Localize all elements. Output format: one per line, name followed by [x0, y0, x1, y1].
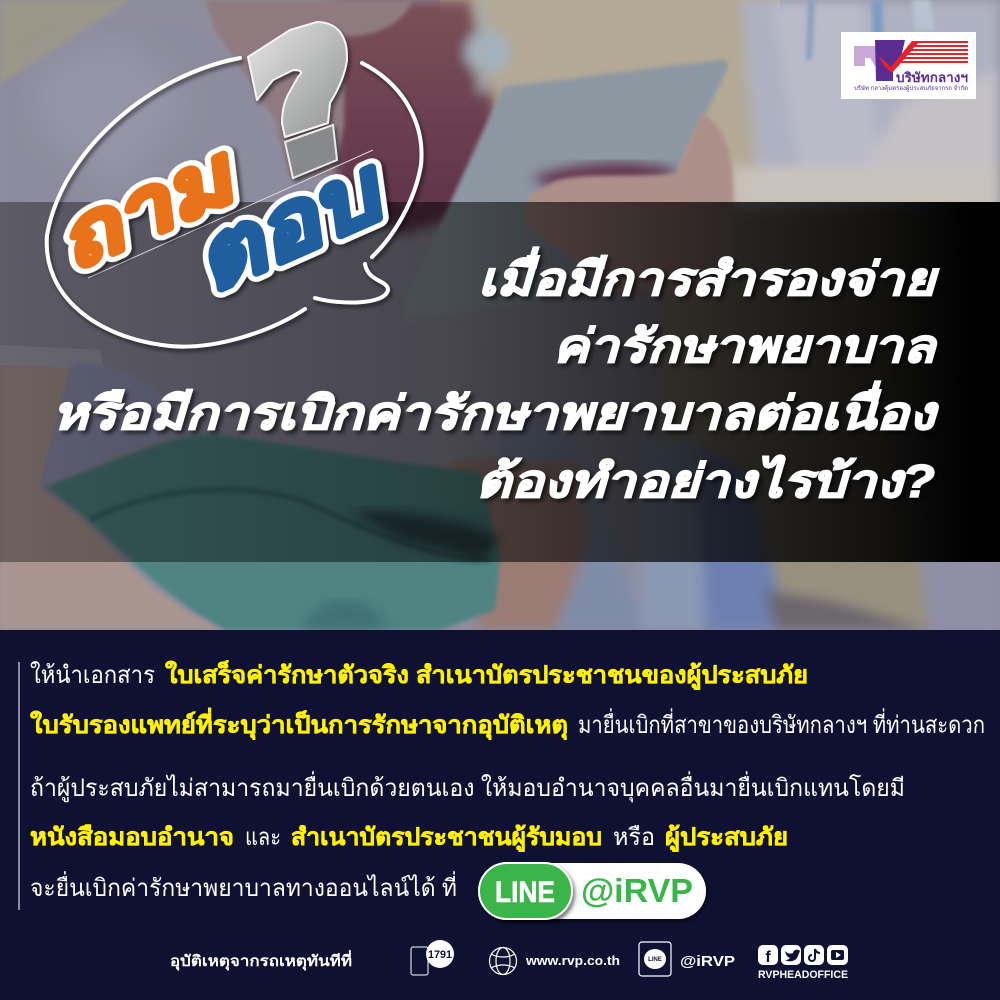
body text block: ถ้าผู้ประสบภัยไม่สามารถมายื่นเบิกด้วยตนเอง ให้มอบอำนาจบุคคลอื่นมายื่นเบิกแทนโดยมี [30, 771, 905, 803]
footer caption: อุบัติเหตุจากรถเหตุทันทีที่ [170, 950, 352, 971]
social icons: RVPHEADOFFICE [758, 969, 848, 981]
gown [0, 20, 430, 470]
title text: เมื่อมีการสำรองจ่าย [478, 246, 940, 305]
question mark icon [248, 22, 347, 178]
social icons: f [765, 949, 771, 966]
social icons [758, 945, 848, 981]
blanket [45, 435, 500, 630]
left rule [18, 662, 20, 910]
LINE handle text: @iRVP [680, 953, 735, 970]
heading: ถาม: ถาม [43, 129, 250, 286]
divider line [88, 150, 373, 278]
stethoscope strips [806, 0, 935, 60]
body text block: และ [245, 824, 281, 851]
tablet [438, 58, 730, 240]
bottom navy panel [0, 630, 1000, 1000]
body text block [30, 660, 985, 902]
title text: หรือมีการเบิกค่ารักษาพยาบาลต่อเนื่อง [52, 380, 939, 439]
body text block: ใบรับรองแพทย์ที่ระบุว่าเป็นการรักษาจากอุบัติเหตุ [30, 707, 568, 741]
title text [52, 246, 940, 507]
body text block: ผู้ประสบภัย [665, 824, 788, 852]
hand [523, 113, 733, 295]
gown sleeve [0, 345, 104, 368]
background photo: patient and clinician [0, 0, 1000, 630]
speech bubble outline [47, 58, 422, 347]
neck [205, 0, 412, 178]
heading: ตอบ: ตอบ [179, 138, 401, 310]
website text: www.rvp.co.th [525, 953, 620, 968]
heading: ถาม: ถาม [43, 129, 250, 286]
body text block: จะยื่นเบิกค่ารักษาพยาบาลทางออนไลน์ได้ ที่ [30, 871, 457, 902]
logo: RVP company [841, 32, 976, 99]
body text block: หรือ [613, 824, 655, 851]
LINE @iRVP button: LINE [495, 876, 555, 909]
LINE @iRVP button: @iRVP [581, 872, 693, 909]
icon: LINE [639, 942, 671, 976]
body text block: ให้นำเอกสาร [30, 661, 155, 689]
LINE @iRVP button [479, 863, 706, 919]
title text: ค่ารักษาพยาบาล [553, 320, 938, 372]
heading: ตอบ: ตอบ [179, 138, 401, 310]
arm [0, 365, 222, 630]
dark title band [0, 202, 1000, 562]
icon: phone 1791: 1791 [428, 949, 452, 961]
logo: RVP company: บริษัทกลางฯ [896, 70, 968, 85]
body text block: ใบเสร็จค่ารักษาตัวจริง สำเนาบัตรประชาชนของผู้ประสบภัย [165, 660, 808, 690]
icon: globe [490, 948, 516, 974]
title text: ต้องทำอย่างไรบ้าง? [476, 454, 935, 507]
body text block: หนังสือมอบอำนาจ [30, 824, 234, 851]
logo: RVP company: บริษัท กลางคุ้มครองผู้ประสบภัยจากรถ จำกัด [854, 85, 968, 92]
icon: LINE: LINE [648, 957, 662, 963]
body text block: สำเนาบัตรประชาชนผู้รับมอบ [291, 824, 602, 852]
icon: phone 1791 [411, 940, 454, 975]
